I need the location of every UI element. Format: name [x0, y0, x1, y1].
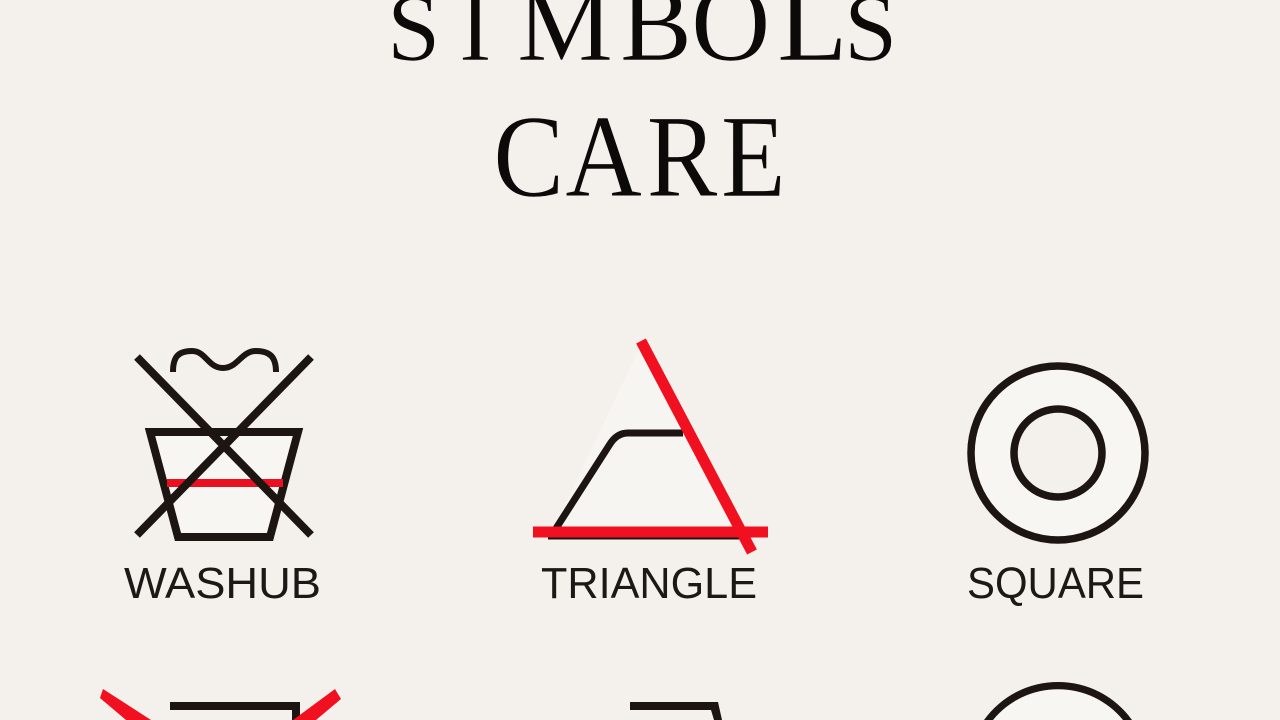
symbol: crossed-out iron triangle — [533, 341, 768, 552]
symbol: crossed-out washtub — [137, 351, 311, 537]
cropped symbol: bottom middle — [630, 702, 722, 720]
cropped symbol: bottom right circle — [984, 682, 1132, 720]
symbol: double circle — [971, 366, 1145, 540]
title: CARE — [493, 92, 786, 222]
label: triangle: TRIANGLE — [541, 559, 757, 608]
title — [387, 0, 897, 222]
cropped symbol: bottom left — [100, 689, 341, 720]
label: washub: WASHUB — [124, 559, 321, 608]
label: square: SQUARE — [967, 559, 1144, 608]
